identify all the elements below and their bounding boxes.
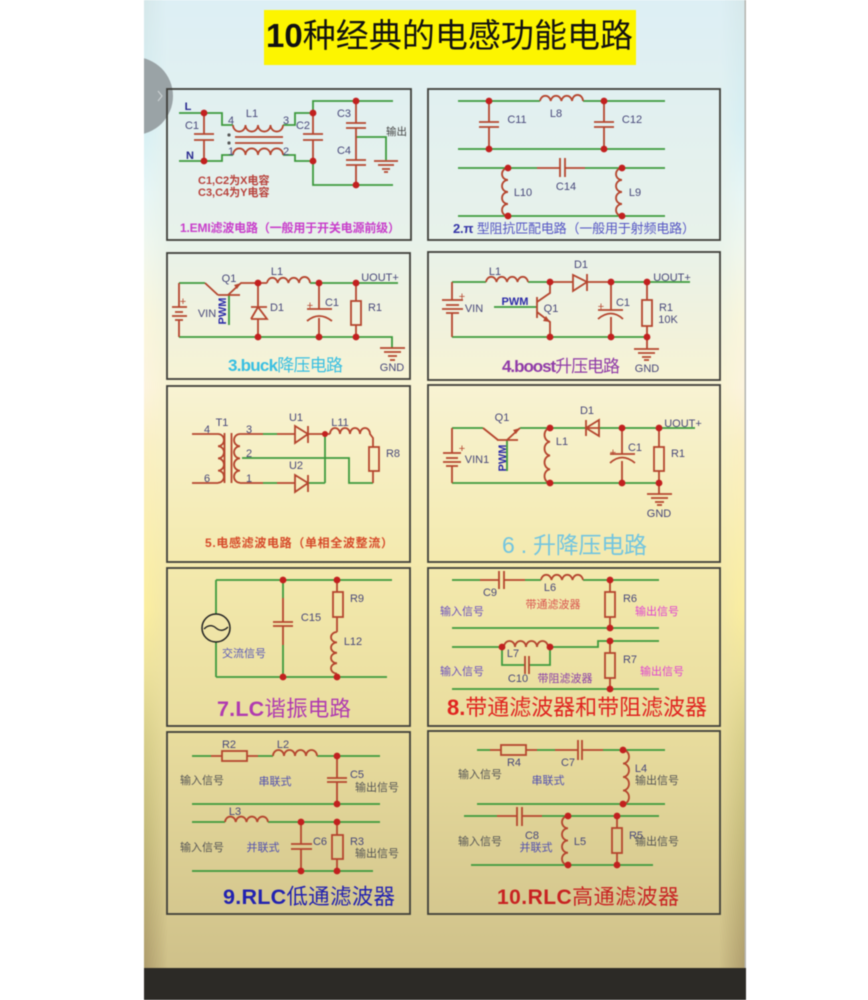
note: capacitor types (198, 173, 270, 199)
component labels: VIN (465, 303, 483, 315)
caption 8: 8.带通滤波器和带阻滤波器 (447, 695, 707, 720)
component labels: 串联式 (258, 775, 292, 788)
component labels: C6 (313, 836, 327, 848)
component labels: C9 (483, 587, 497, 599)
side handle button (144, 58, 174, 134)
component labels: + (598, 301, 604, 313)
component labels: R2 (222, 739, 236, 751)
component labels: L6 (544, 582, 556, 594)
component labels: 并联式 (520, 840, 552, 854)
component labels: C1 (325, 297, 339, 309)
component labels: 10K (658, 314, 678, 326)
component labels: C3 (337, 108, 351, 120)
component labels (222, 593, 364, 660)
component labels: + (459, 291, 465, 303)
panel: 3 buck circuit (167, 253, 410, 379)
component labels: 输出信号 (635, 834, 679, 848)
component labels: C1 (616, 297, 630, 309)
caption 6: 6 . 升降压电路 (502, 532, 647, 558)
component labels: C14 (556, 181, 576, 193)
icon: AC source (202, 614, 230, 642)
component labels: 输出 (386, 125, 407, 138)
title: 10种经典的电感功能电路 (266, 17, 633, 54)
title (264, 10, 636, 65)
component labels: UOUT+ (361, 272, 399, 284)
note: capacitor types: C1,C2为X电容 (198, 173, 270, 187)
component labels: 输出信号 (355, 780, 399, 794)
component labels: L1 (246, 108, 258, 120)
panel: 8 band-pass and band-stop filters (428, 568, 720, 726)
caption 4: 4.boost升压电路 (502, 357, 620, 376)
component labels: C7 (561, 757, 575, 769)
component labels: L8 (550, 108, 562, 120)
component labels: 输入信号 (458, 834, 502, 848)
component labels: D1 (580, 405, 594, 417)
component labels: 输入信号 (180, 773, 224, 787)
component labels: 3 (246, 424, 252, 436)
component labels: 6 (204, 473, 210, 485)
component labels: R1 (659, 302, 673, 314)
caption 10: 10.RLC高通滤波器 (497, 886, 679, 909)
caption 9: 9.RLC低通滤波器 (223, 885, 395, 909)
component labels: L3 (229, 806, 241, 818)
component labels: L1 (556, 436, 568, 448)
component labels: U1 (289, 412, 303, 424)
component labels: R5 (629, 830, 643, 842)
component labels: 1 (246, 473, 252, 485)
component labels: U2 (289, 460, 303, 472)
component labels (507, 108, 642, 199)
component labels: GND (647, 508, 671, 520)
component labels: C1 (628, 442, 642, 454)
component labels: PWM (502, 296, 528, 308)
component labels: C2 (296, 120, 310, 132)
panel: 4 boost circuit (428, 252, 720, 380)
component labels: R9 (350, 593, 364, 605)
component labels: R6 (623, 593, 637, 605)
component labels: R7 (623, 654, 637, 666)
panel: 7 LC resonance (167, 568, 410, 726)
component labels: 输出信号 (640, 664, 684, 678)
component labels: C4 (337, 145, 351, 157)
component labels: + (180, 296, 186, 308)
component labels: 带通滤波器 (526, 598, 580, 611)
component labels: Q1 (544, 303, 558, 315)
caption 1: 1.EMI滤波电路（一般用于开关电源前级） (180, 220, 400, 235)
caption 3: 3.buck降压电路 (228, 356, 343, 375)
component labels: R1 (671, 448, 685, 460)
component labels: L4 (635, 763, 647, 775)
component labels: C15 (301, 612, 321, 624)
component labels: L11 (331, 417, 349, 429)
component labels: C12 (622, 114, 642, 126)
panel: 1 EMI filter circuit (167, 89, 411, 240)
component labels: L (185, 101, 192, 113)
component labels (180, 739, 399, 860)
component labels: 1 (228, 146, 234, 158)
component labels: C5 (350, 769, 364, 781)
component labels: R1 (368, 302, 382, 314)
component labels: L5 (574, 836, 586, 848)
component labels: UOUT+ (653, 272, 691, 284)
panel: 2 pi impedance matching (428, 89, 720, 240)
panel: 5 inductor filter rectifier (167, 386, 410, 562)
component labels: PWM (217, 298, 229, 324)
panel: 9 RLC low-pass filter (167, 732, 410, 914)
component labels (440, 582, 684, 685)
component labels (458, 757, 679, 854)
component labels: 交流信号 (222, 646, 266, 660)
component labels: + (610, 447, 616, 459)
caption 2: 2.π 型阻抗匹配电路（一般用于射频电路） (453, 221, 695, 236)
component labels: D1 (270, 302, 284, 314)
component labels (185, 101, 407, 162)
component labels: N (186, 150, 194, 162)
component labels: GND (635, 363, 659, 375)
component labels: Q1 (495, 412, 509, 424)
component labels: C10 (508, 673, 528, 685)
component labels: L9 (629, 187, 641, 199)
component labels: Q1 (222, 273, 236, 285)
component labels: 并联式 (246, 840, 280, 854)
component labels: 带阻滤波器 (538, 672, 592, 685)
component labels: 输入信号 (458, 767, 502, 781)
component labels (204, 412, 400, 485)
note: capacitor types: C3,C4为Y电容 (198, 185, 270, 199)
component labels: L1 (271, 266, 283, 278)
component labels (180, 266, 404, 374)
component labels: 输出信号 (635, 773, 679, 787)
caption 5: 5.电感滤波电路（单相全波整流） (205, 535, 393, 550)
panel: 10 RLC high-pass filter (428, 731, 720, 914)
component labels: 4 (228, 115, 234, 127)
background image area (144, 0, 746, 968)
component labels: D1 (574, 259, 588, 271)
component labels: 输入信号 (440, 604, 484, 618)
component labels: L7 (507, 648, 519, 660)
component labels: R3 (350, 836, 364, 848)
component labels: 2 (246, 448, 252, 460)
icon: common mode choke L1 (227, 125, 283, 155)
component labels: 3 (283, 115, 289, 127)
component labels: UOUT+ (664, 418, 702, 430)
component labels: 输入信号 (180, 840, 224, 854)
component labels: R8 (386, 448, 400, 460)
panel: 6 buck-boost circuit (428, 385, 720, 562)
component labels: PWM (497, 445, 509, 471)
component labels: L12 (344, 636, 362, 648)
component labels: 输出信号 (635, 604, 679, 618)
component labels: R4 (507, 757, 521, 769)
component labels: + (459, 443, 465, 455)
component labels: L2 (277, 739, 289, 751)
component labels: VIN (198, 308, 216, 320)
component labels: 2 (283, 146, 289, 158)
component labels: GND (380, 362, 404, 374)
component labels: + (307, 300, 313, 312)
component labels (459, 405, 702, 520)
component labels: 输入信号 (440, 664, 484, 678)
component labels: C1 (185, 120, 199, 132)
component labels: VIN1 (465, 454, 489, 466)
component labels: 4 (204, 424, 210, 436)
component labels: L1 (489, 266, 501, 278)
component labels (459, 259, 691, 375)
bottom dark bar (144, 968, 746, 1000)
caption 7: 7.LC谐振电路 (217, 697, 351, 721)
component labels: 串联式 (532, 774, 564, 787)
component labels: T1 (216, 417, 228, 429)
component labels: 输出信号 (355, 846, 399, 860)
component labels: L10 (514, 187, 532, 199)
component labels: C11 (507, 114, 527, 126)
component labels: C8 (525, 830, 539, 842)
